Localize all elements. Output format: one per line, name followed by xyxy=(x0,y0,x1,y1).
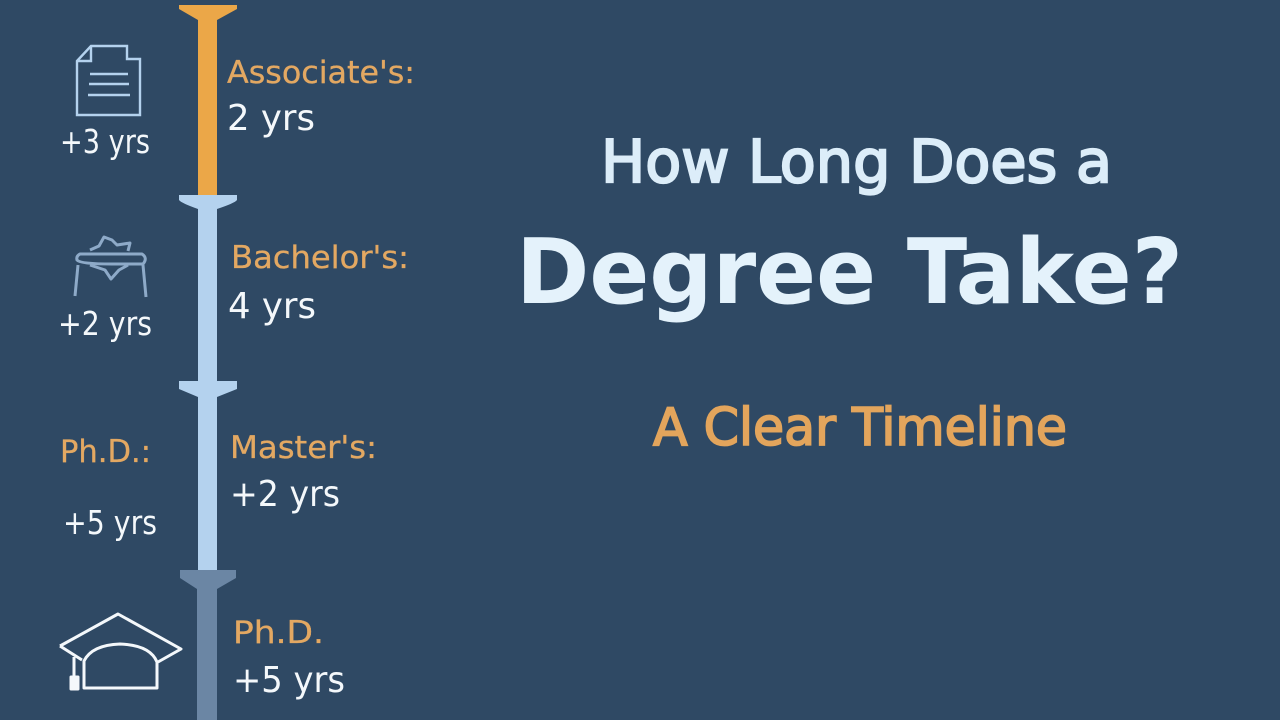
subtitle: A Clear Timeline xyxy=(653,398,1067,458)
label: +2 yrs: +2 yrs xyxy=(58,304,152,343)
value: 4 yrs: 4 yrs xyxy=(228,286,316,327)
timeline xyxy=(179,5,237,720)
label: +3 yrs: +3 yrs xyxy=(60,122,150,161)
segment: ph.d. xyxy=(180,570,236,720)
label: +5 yrs left: +5 yrs xyxy=(63,503,157,542)
value: +2 yrs: +2 yrs xyxy=(230,474,340,515)
icon: document xyxy=(77,46,140,115)
label: associate's: Associate's: xyxy=(227,55,415,91)
segment: master's xyxy=(179,381,237,570)
label: ph.d. left: Ph.D.: xyxy=(60,434,151,470)
icon: graduation cap xyxy=(60,614,181,689)
value: +5 yrs: +5 yrs xyxy=(233,660,345,701)
label: master's: Master's: xyxy=(230,430,377,466)
label: ph.d.: Ph.D. xyxy=(233,615,324,651)
segment: bachelor's xyxy=(179,195,237,381)
title line 2: Degree Take? xyxy=(516,220,1183,325)
segment: associate's xyxy=(179,5,237,195)
icon: desk sketch xyxy=(75,237,146,297)
value: 2 yrs: 2 yrs xyxy=(227,98,315,139)
title line 1: How Long Does a xyxy=(601,127,1112,196)
label: bachelor's: Bachelor's: xyxy=(231,240,409,276)
